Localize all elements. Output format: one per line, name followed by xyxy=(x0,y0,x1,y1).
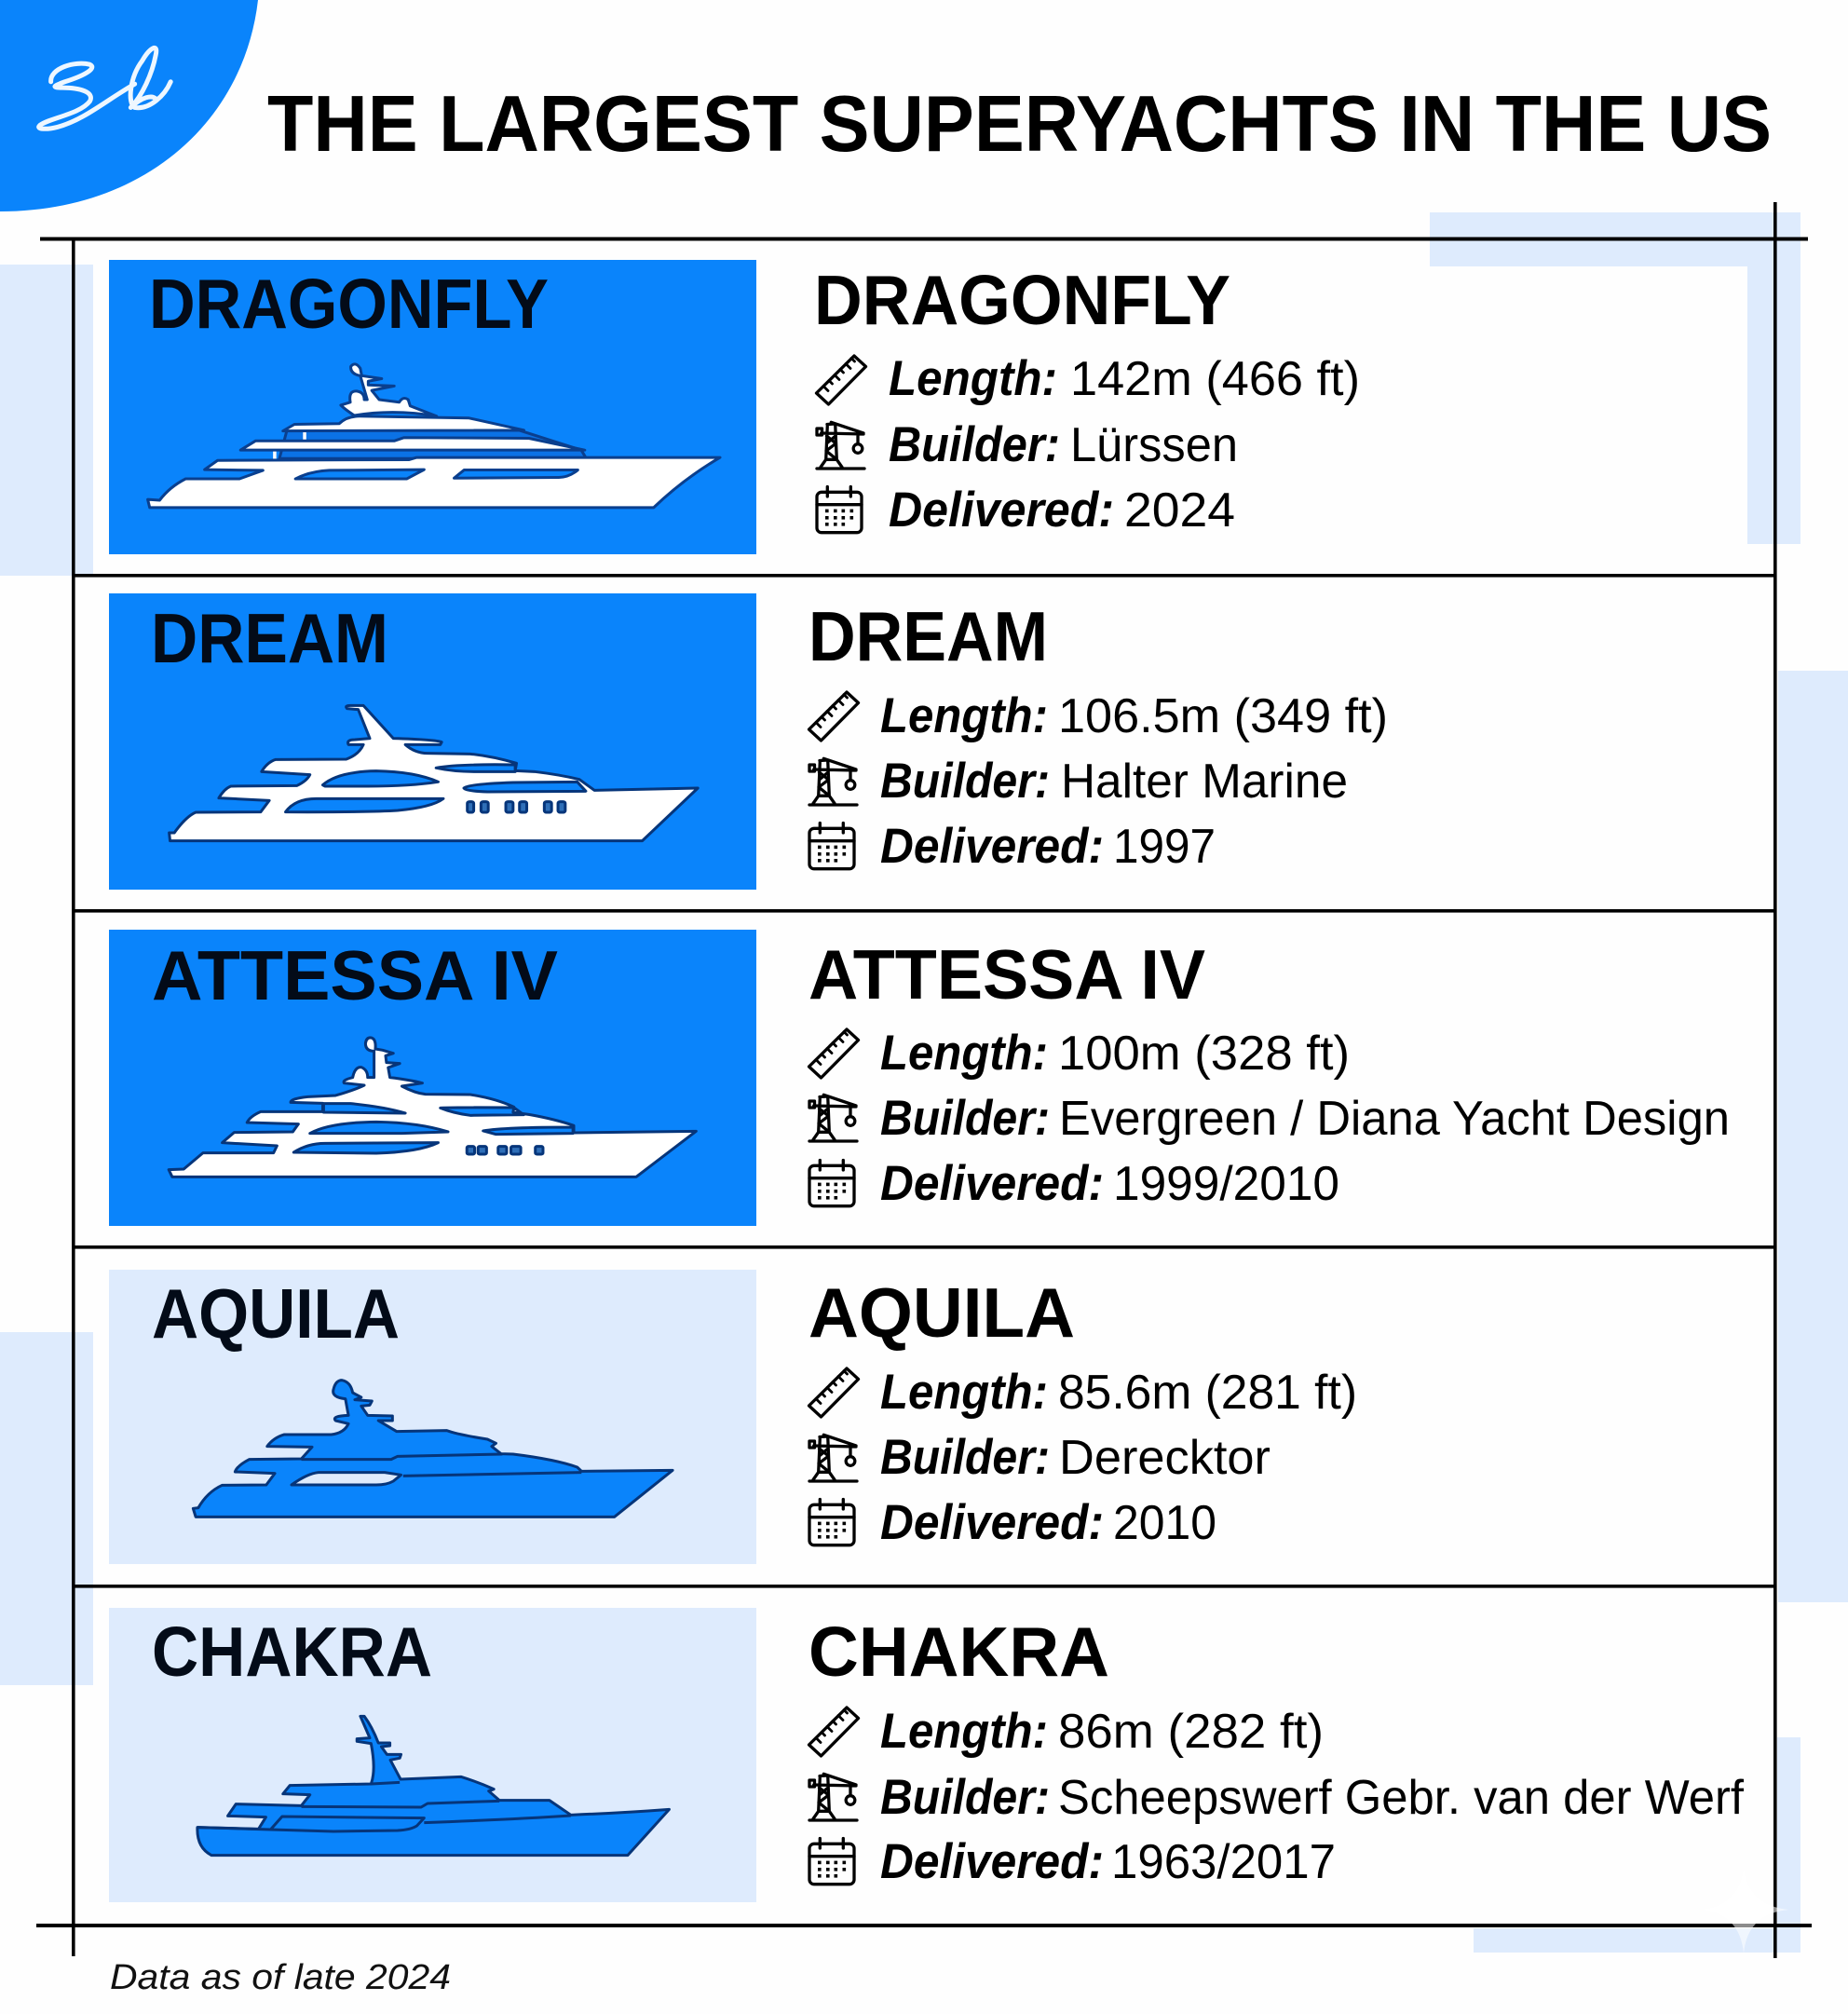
panel label: Chakra: CHAKRA xyxy=(152,1613,432,1691)
delivered line: Delivered: xyxy=(880,1156,1104,1211)
delivered line xyxy=(880,1834,1336,1889)
builder line: Derecktor xyxy=(1059,1431,1270,1485)
icon: calendar xyxy=(809,1500,854,1545)
row: Dragonfly xyxy=(109,260,1360,554)
panel label: Aquila: AQUILA xyxy=(152,1274,400,1353)
heading: Attessa IV: ATTESSA IV xyxy=(808,935,1205,1014)
length line: Length: xyxy=(880,1365,1048,1420)
length line: 85.6m (281 ft) xyxy=(1058,1366,1357,1420)
builder line: Evergreen / Diana Yacht Design xyxy=(1059,1092,1730,1146)
yacht silhouette: Attessa IV xyxy=(169,1038,696,1177)
icon: ruler xyxy=(808,1029,859,1078)
icon: calendar xyxy=(817,486,862,533)
logo badge xyxy=(0,0,258,211)
icon: crane xyxy=(809,1095,857,1141)
yacht silhouette: Dragonfly xyxy=(148,364,720,508)
builder line xyxy=(880,754,1348,809)
heading: Dragonfly: DRAGONFLY xyxy=(814,261,1230,339)
yacht silhouette: Aquila xyxy=(193,1381,673,1517)
row: Aquila xyxy=(109,1270,1357,1564)
row: Dream xyxy=(109,593,1388,890)
builder line: Builder: xyxy=(880,1770,1050,1825)
length line: 100m (328 ft) xyxy=(1058,1027,1350,1081)
length line xyxy=(880,1026,1350,1081)
delivered line xyxy=(880,1156,1339,1211)
icon: ruler xyxy=(816,356,866,404)
icon: ruler xyxy=(808,1708,859,1756)
length line: Length: xyxy=(880,1026,1048,1081)
icon: calendar xyxy=(809,1161,854,1206)
delivered line: Delivered: xyxy=(889,483,1114,538)
builder line: Halter Marine xyxy=(1061,755,1348,809)
length line: 142m (466 ft) xyxy=(1070,352,1360,406)
builder line: Builder: xyxy=(889,417,1060,472)
length line xyxy=(880,1704,1324,1759)
builder line xyxy=(889,417,1238,472)
footnote: Data as of late 2024 xyxy=(110,1958,451,1997)
length line: Length: xyxy=(880,688,1048,743)
panel label: Dream: DREAM xyxy=(151,599,388,677)
delivered line: 2010 xyxy=(1113,1496,1216,1550)
delivered line: 1963/2017 xyxy=(1111,1835,1336,1889)
delivered line: Delivered: xyxy=(880,1495,1104,1550)
heading: Aquila: AQUILA xyxy=(808,1273,1075,1352)
builder line: Builder: xyxy=(880,1430,1050,1485)
icon: crane xyxy=(809,1774,857,1820)
delivered line: Delivered: xyxy=(880,819,1104,874)
panel: Chakra image xyxy=(109,1608,756,1902)
icon: calendar xyxy=(809,823,854,869)
icon: ruler xyxy=(808,692,859,741)
icon: crane xyxy=(809,758,857,805)
delivered line: Delivered: xyxy=(880,1834,1104,1889)
length line: Length: xyxy=(889,351,1057,406)
builder line: Lürssen xyxy=(1070,418,1238,472)
length line xyxy=(889,351,1360,406)
icon: calendar xyxy=(809,1839,854,1885)
length line xyxy=(880,1365,1357,1420)
icon: signature logo xyxy=(39,48,170,129)
length line: 86m (282 ft) xyxy=(1058,1705,1324,1759)
builder line xyxy=(880,1430,1270,1485)
icon: crane xyxy=(809,1435,857,1481)
yacht silhouette: Dream xyxy=(170,705,698,841)
row: Chakra xyxy=(109,1608,1745,1902)
panel: Dream image xyxy=(109,593,756,890)
panel label: Attessa IV: ATTESSA IV xyxy=(152,936,558,1014)
delivered line: 1999/2010 xyxy=(1113,1157,1339,1211)
yacht silhouette: Chakra xyxy=(197,1716,669,1856)
builder line: Scheepswerf Gebr. van der Werf xyxy=(1058,1771,1745,1825)
panel: Dragonfly image xyxy=(109,260,756,554)
length line: Length: xyxy=(880,1704,1048,1759)
builder line: Builder: xyxy=(880,754,1050,809)
icon: ruler xyxy=(808,1368,859,1417)
heading: Chakra: CHAKRA xyxy=(808,1613,1109,1691)
panel: Attessa IV image xyxy=(109,930,756,1226)
delivered line: 1997 xyxy=(1113,820,1216,874)
panel: Aquila image xyxy=(109,1270,756,1564)
title: THE LARGEST SUPERYACHTS IN THE US xyxy=(267,80,1772,169)
builder line: Builder: xyxy=(880,1091,1050,1146)
length line: 106.5m (349 ft) xyxy=(1058,689,1388,743)
row: Attessa IV xyxy=(109,930,1730,1226)
sparkle mark xyxy=(1700,1866,1789,1953)
heading: Dream: DREAM xyxy=(808,597,1048,675)
delivered line xyxy=(889,483,1235,538)
icon: crane xyxy=(817,422,864,469)
length line xyxy=(880,688,1388,743)
delivered line: 2024 xyxy=(1124,483,1235,538)
panel label: Dragonfly: DRAGONFLY xyxy=(149,265,549,343)
